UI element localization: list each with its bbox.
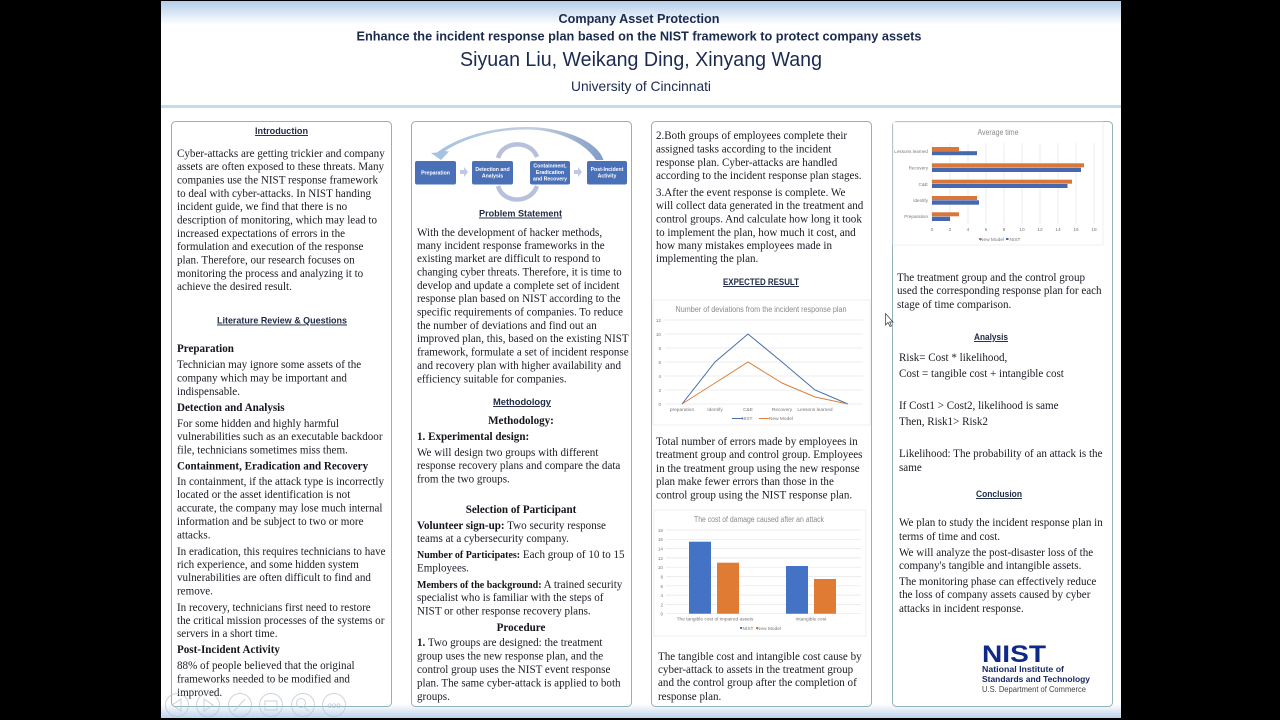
chart: average time horizontal bar chart: Lessons learned	[894, 149, 928, 154]
text: literature review body	[177, 343, 386, 699]
text: literature review body: remove.	[177, 586, 213, 598]
text: introduction body: description of monitoring, which may lead to	[177, 214, 377, 226]
chart: number of deviations line chart: 8	[658, 346, 661, 351]
text: problem statement body: develop and update a complete set of incident	[417, 280, 620, 292]
chart: cost of damage bar chart: The tangible cost of impaired assets	[677, 616, 754, 622]
box: detection and analysis	[472, 161, 513, 184]
text: methodology body: Methodology:	[488, 415, 554, 427]
legend: NIST	[1010, 237, 1021, 243]
logo: NIST: NIST	[982, 641, 1046, 668]
text: literature review body: company which may be important and	[177, 372, 347, 384]
text: chart description: The treatment group and the control group	[897, 272, 1085, 284]
text: conclusion body: the loss of company assets caused by cyber	[899, 589, 1091, 601]
text: literature review body: vulnerabilities are often difficult to find and	[177, 572, 371, 584]
text: methodology body: control group uses the NIST event response	[417, 664, 610, 676]
chart: number of deviations line chart: Number of deviations from the incident response plan	[676, 305, 846, 314]
text: errors description	[656, 436, 862, 502]
text: conclusion body: We will analyze the post-disaster loss of the	[899, 547, 1093, 559]
legend	[979, 237, 1021, 243]
text: methodology body: NIST or other response recovery plans.	[417, 606, 591, 618]
legend	[740, 626, 781, 632]
chart: number of deviations line chart: 12	[656, 318, 661, 323]
logo: NIST: U.S. Department of Commerce	[982, 684, 1086, 694]
chart: cost of damage bar chart: 10	[658, 565, 663, 570]
box: post-incident activity: Post-Incident	[591, 167, 624, 173]
legend: NIST	[743, 626, 754, 632]
text: literature review body: For some hidden and highly harmful	[177, 418, 339, 430]
chart: cost of damage bar chart	[654, 510, 866, 636]
chart: cost of damage bar chart: The cost of damage caused after an attack	[694, 515, 825, 524]
text: problem statement body: framework, formulate a set of incident response	[417, 346, 629, 358]
line: NIST	[682, 334, 848, 404]
legend	[732, 416, 793, 422]
chart: number of deviations line chart: Recovery	[772, 407, 793, 413]
title block	[356, 11, 922, 94]
text: literature review body: rich experience, and some hidden system	[177, 559, 359, 571]
box: containment: and Recovery	[533, 176, 567, 182]
text: conclusion body: company's tangible and intangible assets.	[899, 560, 1082, 572]
chart: number of deviations line chart: preparation	[670, 407, 694, 413]
legend: NIST	[742, 416, 753, 422]
text: problem statement body	[417, 227, 629, 386]
heading: analysis: Analysis	[974, 332, 1008, 343]
text: methodology body: groups.	[417, 691, 450, 703]
text: literature review body: 88% of people believed that the original	[177, 660, 355, 672]
chart: cost of damage bar chart: 8	[660, 574, 663, 580]
text: literature review body: In eradication, this requires technicians to have	[177, 546, 386, 558]
text: problem statement body: existing market are difficult to respond to	[417, 253, 601, 265]
title block: University of Cincinnati	[571, 78, 711, 94]
chart: number of deviations line chart: Lessons learned	[797, 407, 833, 413]
text: literature review body: file, technicians sometimes miss them.	[177, 444, 348, 456]
text: introduction body: increased expectations of errors in the	[177, 228, 345, 240]
text: introduction body: companies use the NIST response framework	[177, 174, 378, 186]
chart: cost of damage bar chart: 0	[660, 612, 663, 616]
chart: average time horizontal bar chart	[893, 122, 1103, 245]
text: problem statement body: improved plan, this, based on the existing NIST	[417, 333, 629, 345]
text: literature review body: information and be subject to two or more	[177, 516, 364, 528]
text: problem statement body: response plan based on NIST according to the	[417, 293, 621, 305]
box: preparation	[415, 161, 456, 184]
text: procedure continued: to implement the plan, how much it cost, and	[656, 227, 856, 239]
box: detection and analysis: Analysis	[482, 174, 503, 180]
chart: average time horizontal bar chart: 2	[949, 227, 952, 233]
text: cost description: and the control group after the completion of	[658, 677, 857, 689]
text: errors description: plan make fewer errors than those in the	[656, 476, 834, 488]
text: conclusion body: terms of time and cost.	[899, 531, 1000, 543]
chart: average time horizontal bar chart: Preparation	[904, 214, 928, 219]
chart: average time horizontal bar chart: 4	[967, 227, 970, 233]
text: introduction body: plan. Therefore, our research focuses on	[177, 254, 355, 266]
text: procedure continued: according to the incident response plan stages.	[656, 170, 862, 182]
text: methodology body: from the two groups.	[417, 474, 510, 486]
chart: cost of damage bar chart: 16	[658, 537, 663, 542]
box: containment	[530, 161, 570, 184]
chart: average time horizontal bar chart: 18	[1091, 227, 1097, 233]
text: procedure continued: implementing the plan.	[656, 253, 759, 265]
heading: methodology: Methodology	[493, 397, 552, 408]
chart: number of deviations line chart: Identify	[707, 407, 723, 413]
diagram: incident response lifecycle	[415, 127, 627, 200]
text: methodology body: Selection of Participant	[466, 504, 577, 516]
text: literature review body: Technician may ignore some assets of the	[177, 359, 361, 371]
text: literature review body: frameworks needed to be modified and	[177, 674, 350, 686]
chart: cost of damage bar chart: 18	[658, 528, 663, 533]
text: methodology body: We will design two groups with different	[417, 447, 599, 459]
chart: average time horizontal bar chart: 14	[1055, 227, 1061, 233]
text: literature review body: servers in a short time.	[177, 628, 278, 640]
text: methodology body: Procedure	[497, 622, 545, 634]
legend: New Model	[769, 416, 793, 422]
text: analysis body: Then, Risk1> Risk2	[899, 416, 988, 428]
text: methodology body: 1. Two groups are designed: the treatment	[417, 637, 603, 649]
text: methodology body: group uses the new response plan, and the	[417, 650, 603, 662]
legend: New Model	[980, 237, 1004, 243]
heading: literature review: Literature Review & Questions	[217, 316, 347, 326]
chart: average time horizontal bar chart: 16	[1073, 227, 1079, 233]
text: procedure continued: 2.Both groups of employees complete their	[656, 130, 847, 142]
chart: average time horizontal bar chart: 10	[1019, 227, 1025, 233]
text: literature review body: Detection and Analysis	[177, 402, 285, 414]
text: conclusion body	[899, 517, 1103, 615]
text: literature review body: Preparation	[177, 343, 234, 355]
legend: New Model	[757, 626, 781, 632]
chart: number of deviations line chart	[653, 300, 870, 425]
chart: number of deviations line chart: 6	[658, 360, 661, 365]
chart: number of deviations line chart: 10	[656, 332, 661, 337]
text: chart description	[897, 272, 1102, 311]
text: chart description: stage of time comparison.	[897, 299, 1012, 311]
chart: number of deviations line chart: 0	[658, 402, 661, 407]
text: problem statement body: many incident response frameworks in the	[417, 240, 605, 252]
arrow: cycle between detection and containment	[498, 144, 537, 200]
text: analysis body: If Cost1 > Cost2, likelihood is same	[899, 400, 1059, 412]
text: conclusion body: The monitoring phase can effectively reduce	[899, 576, 1096, 588]
text: problem statement body: With the development of hacker methods,	[417, 227, 602, 239]
text: methodology body: Members of the background: A trained security	[417, 579, 623, 591]
chart: number of deviations line chart: 4	[658, 374, 661, 379]
box: containment: Containment,	[533, 164, 567, 170]
text: methodology body	[417, 415, 625, 703]
text: problem statement body: and recovery plan with higher availability and	[417, 360, 621, 372]
chart: number of deviations line chart: 2	[658, 388, 661, 393]
text: literature review body: In recovery, technicians first need to restore	[177, 602, 371, 614]
text: analysis body: Risk= Cost * likelihood,	[899, 352, 1008, 364]
text: literature review body: the critical mission processes of the systems or	[177, 615, 385, 627]
box: containment: Eradication	[536, 170, 564, 176]
text: cost description: The tangible cost and intangible cost cause by	[658, 651, 862, 663]
chart: average time horizontal bar chart: 12	[1037, 227, 1043, 233]
text: introduction body: to deal with cyber-attacks. In NIST handing	[177, 188, 372, 200]
text: procedure continued: how many mistakes employees made in	[656, 240, 833, 252]
text: literature review body: In containment, if the attack type is incorrectly	[177, 476, 385, 488]
chart: cost of damage bar chart: 2	[660, 602, 663, 608]
text: literature review body: Containment, Eradication and Recovery	[177, 460, 369, 472]
chart: cost of damage bar chart: 12	[658, 556, 663, 561]
presentation toolbar	[166, 694, 346, 716]
text: errors description: control group using the NIST response plan.	[656, 490, 852, 502]
box: post-incident activity	[587, 161, 627, 184]
chart: average time horizontal bar chart: Identify	[913, 198, 929, 203]
title block: Siyuan Liu, Weikang Ding, Xinyang Wang	[460, 49, 822, 71]
text: methodology body: Volunteer sign-up: Two security response	[417, 520, 606, 532]
text: cost description	[658, 651, 862, 703]
chart: average time horizontal bar chart: Recovery	[909, 166, 929, 170]
chart: cost of damage bar chart: 6	[660, 584, 663, 589]
text: analysis body: Likelihood: The probability of an attack is the	[899, 448, 1103, 460]
box: detection and analysis: Detection and	[475, 167, 510, 173]
text: problem statement body: specific requirements of companies. To reduce	[417, 306, 623, 318]
text: errors description: treatment group and control group. Employees	[656, 449, 862, 461]
text: methodology body: specialist who is familiar with the steps of	[417, 592, 604, 604]
chart: average time horizontal bar chart: Average time	[978, 128, 1019, 137]
text: procedure continued: will collect data generated in the treatment and	[656, 200, 864, 212]
chart: average time horizontal bar chart: 0	[931, 227, 934, 233]
chart: cost of damage bar chart: 14	[658, 546, 663, 552]
text: procedure continued: 3.After the event response is complete. We	[656, 187, 845, 199]
logo: NIST: Standards and Technology	[982, 674, 1090, 684]
text: literature review body: Post-Incident Activity	[177, 644, 280, 656]
text: problem statement body: efficiency suitable for companies.	[417, 374, 567, 386]
text: introduction body	[177, 148, 385, 293]
heading: expected result: EXPECTED RESULT	[723, 277, 799, 288]
chart: average time horizontal bar chart: 6	[985, 227, 988, 233]
arrow: step three	[574, 167, 582, 177]
arrow: feedback arc	[431, 127, 604, 160]
chart: cost of damage bar chart: 4	[660, 593, 663, 598]
logo: NIST	[982, 641, 1090, 694]
text: introduction body: incident guide, we find that there is no	[177, 201, 348, 213]
text: introduction body: achieve the desired result.	[177, 281, 292, 293]
text: literature review body: indispensable.	[177, 386, 240, 398]
box: post-incident activity: Activity	[598, 174, 616, 180]
text: errors description: in the treatment group using the new response	[656, 463, 860, 475]
text: methodology body: Employees.	[417, 562, 469, 574]
chart: average time horizontal bar chart: C&E	[919, 182, 928, 187]
heading: introduction: Introduction	[255, 126, 308, 137]
chart: cost of damage bar chart: intangible cost	[796, 616, 827, 622]
text: literature review body: attacks.	[177, 530, 211, 542]
text: analysis body	[899, 352, 1103, 474]
chart: number of deviations line chart: C&E	[743, 407, 753, 413]
text: literature review body: improved.	[177, 687, 222, 699]
text: analysis body: same	[899, 462, 922, 474]
panel: procedure and expected result	[652, 122, 872, 706]
text: introduction body: monitoring the process and analyzing it to	[177, 268, 364, 280]
logo: NIST: National Institute of	[982, 664, 1064, 674]
text: methodology body: teams at a cybersecurity company.	[417, 533, 569, 545]
heading: conclusion: Conclusion	[976, 489, 1022, 500]
text: methodology body: Number of Participates: Each group of 10 to 15	[417, 549, 625, 561]
text: procedure continued	[656, 130, 864, 265]
line: New Model	[682, 362, 848, 404]
text: analysis body: Cost = tangible cost + intangible cost	[899, 368, 1065, 380]
text: methodology body: plan. The same cyber-attack is applied to both	[417, 678, 621, 690]
text: conclusion body: We plan to study the incident response plan in	[899, 517, 1103, 529]
text: literature review body: vulnerabilities such as an executable backdoor	[177, 431, 383, 443]
slide background	[161, 1, 1121, 718]
text: conclusion body: attacks in incident response.	[899, 603, 1024, 615]
text: methodology body: response recovery plans and compare the data	[417, 460, 620, 472]
text: cost description: cyber-attack to assets in the treatment group	[658, 664, 854, 676]
heading: problem statement: Problem Statement	[479, 208, 563, 220]
text: cost description: response plan.	[658, 691, 722, 703]
text: introduction body: formulation and execution of the response	[177, 241, 364, 253]
presentation toolbar: ooo	[327, 701, 341, 710]
text: problem statement body: the number of deviations and find out an	[417, 320, 597, 332]
text: methodology body: 1. Experimental design:	[417, 431, 529, 443]
panel: introduction and literature review	[172, 122, 392, 706]
text: errors description: Total number of errors made by employees in	[656, 436, 858, 448]
arrow: step one	[460, 167, 468, 177]
text: introduction body: assets are often exposed to these threats. Many	[177, 161, 385, 173]
text: procedure continued: assigned tasks according to the incident	[656, 144, 832, 156]
text: procedure continued: response plan. Cyber-attacks are handled	[656, 157, 838, 169]
panel: average time, analysis and conclusion	[892, 122, 1112, 706]
bars	[932, 147, 1084, 221]
box: preparation: Preparation	[421, 170, 450, 176]
title block: Enhance the incident response plan based on the NIST framework to protect company assets	[356, 28, 922, 44]
chart: average time horizontal bar chart: 8	[1003, 227, 1006, 233]
title block: Company Asset Protection	[558, 11, 720, 26]
panel: problem statement and methodology	[412, 122, 632, 706]
text: problem statement body: changing cyber threats. Therefore, it is time to	[417, 266, 622, 278]
mouse cursor	[886, 314, 893, 326]
text: procedure continued: control groups. And calculate how long it took	[656, 214, 862, 226]
bars	[689, 542, 836, 614]
text: literature review body: located or the asset identification is not	[177, 489, 351, 501]
text: literature review body: accurate, the company may lose much internal	[177, 502, 382, 514]
text: chart description: used the corresponding response plan for each	[897, 285, 1102, 297]
text: introduction body: Cyber-attacks are getting trickier and company	[177, 148, 385, 160]
